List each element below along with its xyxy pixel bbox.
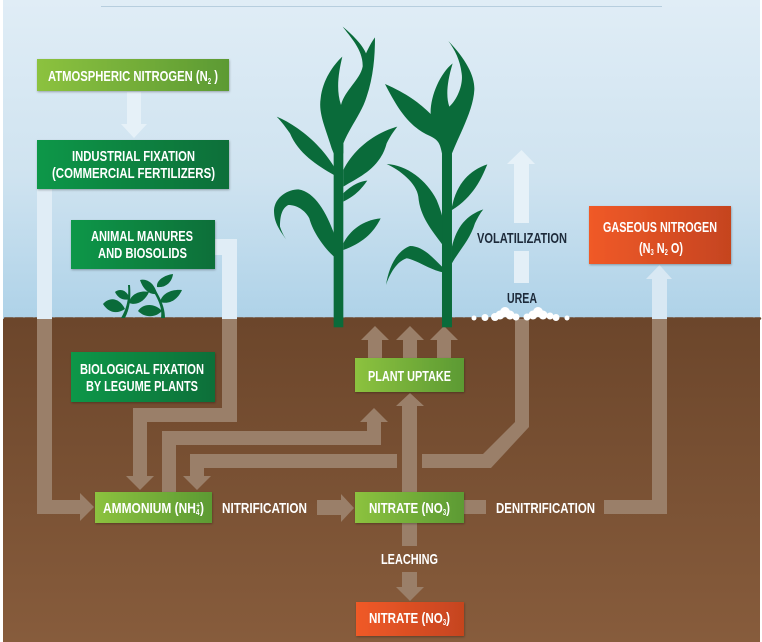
- arrow: nitrate to denitrification: [464, 500, 486, 514]
- box: biological fixation: BY LEGUME PLANTS: [86, 378, 198, 395]
- label: urea: UREA: [507, 290, 537, 307]
- box: ammonium: ): [200, 500, 204, 517]
- box: nitrate leached: NITRATE (NO: [369, 610, 465, 627]
- label: nitrification: NITRIFICATION: [222, 500, 307, 517]
- box: gaseous nitrogen: O): [668, 240, 683, 257]
- box: atmospheric nitrogen: ): [211, 68, 218, 85]
- box: ammonium: 4: [196, 508, 200, 517]
- icon: small legume plant: [103, 274, 182, 318]
- arrow: industrial fixation to ammonium: [37, 189, 94, 521]
- top rule: [101, 6, 662, 7]
- box: atmospheric nitrogen: [37, 59, 229, 91]
- arrows: plant uptake to roots: [361, 326, 458, 358]
- arrow: nitrification: [317, 494, 354, 522]
- arrow: atmospheric nitrogen to industrial fixation: [121, 92, 147, 138]
- box: atmospheric nitrogen: ATMOSPHERIC NITROGEN (N: [48, 68, 261, 85]
- box: atmospheric nitrogen: 2: [208, 77, 212, 86]
- box: gaseous nitrogen: 3: [650, 248, 654, 257]
- box: nitrate: [355, 492, 464, 523]
- box: ammonium: [95, 492, 212, 523]
- label: volatilization: VOLATILIZATION: [477, 230, 567, 247]
- box: gaseous nitrogen: N: [654, 240, 665, 257]
- icon: corn plants: [274, 27, 487, 327]
- arrow: volatilization: [507, 150, 535, 283]
- box: industrial fixation: INDUSTRIAL FIXATION: [72, 148, 195, 165]
- box: industrial fixation: [37, 140, 229, 189]
- corn plant left: [274, 27, 397, 327]
- box: ammonium: +: [196, 501, 200, 510]
- sky background: [3, 0, 760, 320]
- corn plant right: [385, 41, 487, 327]
- box: nitrate leached: [356, 602, 464, 636]
- box: nitrate: NITRATE (NO: [369, 500, 465, 517]
- box: ammonium: AMMONIUM (NH: [103, 500, 220, 517]
- box: nitrate: 3: [443, 508, 447, 517]
- urea pellets: [472, 307, 570, 321]
- box: gaseous nitrogen: 2: [665, 248, 668, 257]
- arrow: ammonium to plant uptake: [162, 408, 388, 492]
- box: animal manures: ANIMAL MANURES: [91, 228, 193, 245]
- box: gaseous nitrogen: [589, 206, 731, 264]
- box: plant uptake: PLANT UPTAKE: [368, 368, 451, 385]
- box: nitrate: ): [446, 500, 450, 517]
- arrow: leaching to nitrate: [396, 572, 424, 601]
- label: leaching: LEACHING: [381, 551, 438, 568]
- arrow: animal manures to ammonium: [126, 239, 237, 490]
- arrow: nitrate to plant uptake: [396, 393, 424, 492]
- box: animal manures: AND BIOSOLIDS: [98, 245, 187, 262]
- box: nitrate leached: ): [446, 610, 450, 627]
- arrow: urea to nitrate path: [422, 319, 529, 468]
- box: industrial fixation: (COMMERCIAL FERTILIZERS): [52, 165, 215, 182]
- box: nitrate leached: 3: [443, 618, 447, 627]
- arrow: leaching upper stem: [402, 523, 417, 546]
- arrow: denitrification to gaseous nitrogen: [604, 265, 672, 514]
- box: biological fixation: [71, 352, 215, 402]
- box: plant uptake: [355, 358, 464, 392]
- label: denitrification: DENITRIFICATION: [496, 500, 595, 517]
- box: gaseous nitrogen: GASEOUS NITROGEN: [603, 219, 717, 236]
- soil background: [3, 318, 760, 642]
- box: biological fixation: BIOLOGICAL FIXATION: [80, 361, 204, 378]
- box: animal manures: [71, 220, 215, 269]
- box: gaseous nitrogen: (N: [639, 240, 655, 257]
- arrow: nitrate return to ammonium: [183, 454, 397, 490]
